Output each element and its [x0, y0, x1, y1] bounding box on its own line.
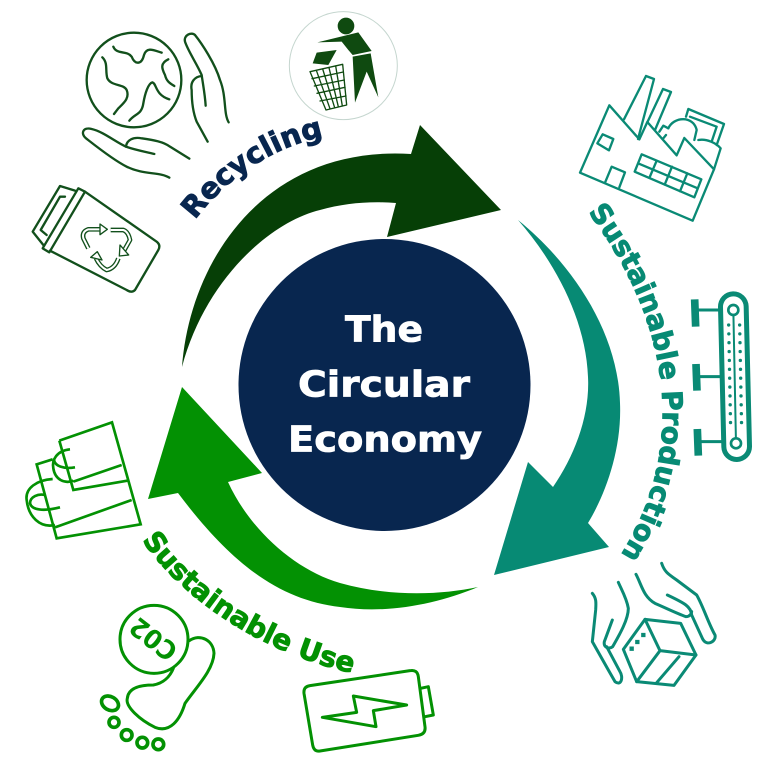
- title: The Circular Economy: [288, 310, 482, 460]
- title: The Circular Economy: The: [345, 310, 423, 350]
- icon: globe in hands: [83, 33, 229, 178]
- title: The Circular Economy: Circular: [298, 364, 470, 406]
- icon: factory: [580, 76, 724, 221]
- icon: conveyor belt: [695, 299, 742, 456]
- icon: hands holding box: [592, 563, 715, 685]
- icon: CO2 footprint: C02: [124, 610, 184, 666]
- icon: shopping bags: [27, 422, 141, 538]
- icon: recycling bin: [33, 186, 159, 292]
- arrow: production to use: [494, 220, 620, 575]
- heading: Sustainable Use: Sustainable Use: [143, 531, 354, 672]
- icon: CO2 footprint: [99, 605, 214, 750]
- heading: Recycling: Recycling: [180, 121, 322, 218]
- icon: battery: [304, 670, 433, 751]
- use icons: [99, 605, 433, 751]
- arrow: use to recycling: [148, 387, 478, 609]
- production icons: [580, 76, 742, 456]
- recycling icons: [33, 12, 397, 292]
- icon: person throwing litter in bin: [289, 12, 397, 120]
- arrow: recycling to production: [182, 125, 501, 367]
- centre circle with title: [238, 239, 530, 531]
- title: The Circular Economy: Economy: [288, 420, 482, 460]
- heading: Sustainable Production: Sustainable Production: [590, 203, 684, 560]
